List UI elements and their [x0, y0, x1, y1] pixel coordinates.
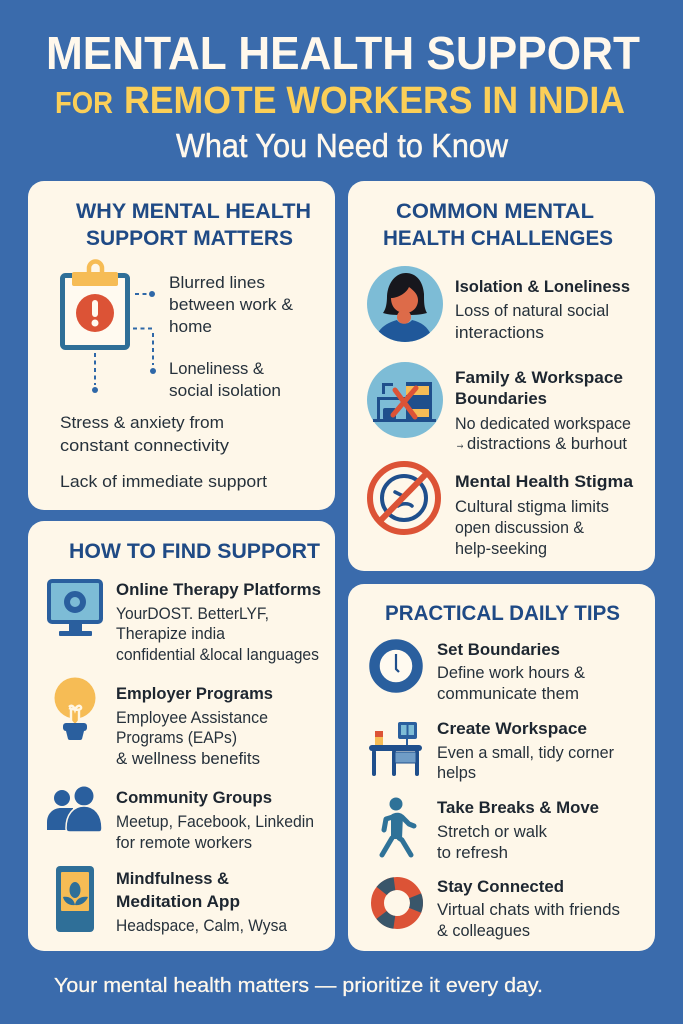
heading: why it matters: SUPPORT MATTERS: [86, 227, 293, 250]
text: take breaks: [437, 798, 599, 862]
heading: challenges: HEALTH CHALLENGES: [383, 227, 613, 250]
footer message: Your mental health matters — prioritize it every day.: [54, 975, 543, 997]
text: community groups: [116, 788, 314, 852]
heading: tips: PRACTICAL DAILY TIPS: [385, 602, 620, 625]
text: mental health stigma: help-seeking: [455, 540, 547, 558]
text: family and workspace boundaries: Family & Workspace: [455, 368, 623, 387]
title: [46, 27, 640, 164]
text: isolation and loneliness: [455, 277, 630, 342]
icon: desk: [369, 722, 422, 776]
heading: why it matters: [76, 200, 311, 250]
text: isolation and loneliness: Isolation & Loneliness: [455, 277, 630, 296]
text: employer programs: Programs (EAPs): [116, 729, 237, 747]
text: why points: social isolation: [169, 382, 281, 400]
text: set boundaries: Set Boundaries: [437, 640, 560, 659]
text: mindfulness apps: Headspace, Calm, Wysa: [116, 917, 288, 935]
text: why points: between work &: [169, 296, 293, 314]
icon: clock: [374, 644, 418, 688]
text: stay connected: & colleagues: [437, 922, 530, 940]
title: MENTAL HEALTH SUPPORT: [46, 27, 640, 79]
text: take breaks: Take Breaks & Move: [437, 798, 599, 817]
panel: why mental health support matters: [28, 181, 335, 510]
text: take breaks: to refresh: [437, 844, 508, 862]
text: why points: Loneliness &: [169, 360, 264, 378]
text: employer programs: & wellness benefits: [116, 750, 260, 768]
icon: life ring: [378, 884, 416, 922]
heading: challenges: [383, 200, 613, 250]
text: mental health stigma: Cultural stigma limits: [455, 498, 609, 516]
text: family and workspace boundaries: No dedicated workspace: [455, 415, 631, 433]
text: family and workspace boundaries: →: [455, 435, 465, 453]
text: mindfulness apps: Meditation App: [116, 892, 240, 911]
text: set boundaries: Define work hours &: [437, 664, 585, 682]
panel: practical daily tips: [348, 584, 655, 951]
text: online therapy: confidential &local languages: [116, 646, 319, 664]
panel: common mental health challenges: [348, 181, 655, 571]
icon: clipboard with alert: [62, 262, 128, 348]
icon: meditation app phone: [56, 866, 94, 932]
text: create workspace: [437, 719, 614, 782]
text: employer programs: Employee Assistance: [116, 709, 268, 727]
text: mental health stigma: Mental Health Stigma: [455, 472, 634, 491]
text: stay connected: [437, 877, 620, 940]
text: employer programs: Employer Programs: [116, 684, 273, 703]
text: set boundaries: [437, 640, 585, 703]
icon: workspace crossed: [367, 362, 443, 438]
text: isolation and loneliness: interactions: [455, 324, 544, 342]
panel: how to find support: [28, 521, 335, 951]
text: family and workspace boundaries: [455, 368, 631, 453]
icon: stigma prohibited: [370, 464, 438, 532]
heading: find support: HOW TO FIND SUPPORT: [69, 540, 320, 563]
text: online therapy: [116, 580, 321, 664]
text: isolation and loneliness: Loss of natural social: [455, 302, 609, 320]
title: What You Need to Know: [176, 127, 508, 164]
text: why points: constant connectivity: [60, 437, 230, 455]
title: FOR: [55, 85, 113, 120]
icon: lonely person: [367, 266, 443, 347]
text: why points: home: [169, 318, 212, 336]
text: create workspace: helps: [437, 764, 476, 782]
text: why points: Blurred lines: [169, 274, 265, 292]
connector lines: [92, 291, 156, 393]
title: REMOTE WORKERS IN INDIA: [124, 80, 625, 122]
text: community groups: Meetup, Facebook, Linkedin: [116, 813, 314, 831]
heading: why it matters: WHY MENTAL HEALTH: [76, 200, 311, 223]
text: create workspace: Create Workspace: [437, 719, 587, 738]
text: mindfulness apps: [116, 869, 288, 935]
text: family and workspace boundaries: Boundaries: [455, 389, 547, 408]
text: set boundaries: communicate them: [437, 685, 579, 703]
text: stay connected: Stay Connected: [437, 877, 564, 896]
heading: challenges: COMMON MENTAL: [396, 200, 594, 223]
text: community groups: for remote workers: [116, 834, 252, 852]
icon: light bulb: [54, 678, 96, 740]
text: create workspace: Even a small, tidy corner: [437, 744, 614, 762]
text: mental health stigma: [455, 472, 634, 558]
text: online therapy: Online Therapy Platforms: [116, 580, 321, 599]
text: mindfulness apps: Mindfulness &: [116, 869, 229, 888]
text: why points: Lack of immediate support: [60, 473, 267, 491]
text: community groups: Community Groups: [116, 788, 272, 807]
icon: people: [47, 786, 102, 832]
text: mental health stigma: open discussion &: [455, 519, 584, 537]
text: family and workspace boundaries: distractions & burhout: [467, 435, 627, 453]
text: why points: Stress & anxiety from: [60, 414, 224, 432]
text: employer programs: [116, 684, 273, 768]
icon: monitor: [49, 581, 101, 636]
text: why points: [60, 274, 293, 491]
text: stay connected: Virtual chats with friends: [437, 901, 620, 919]
text: online therapy: YourDOST. BetterLYF,: [116, 605, 269, 623]
text: take breaks: Stretch or walk: [437, 823, 548, 841]
icon: walking person: [382, 798, 414, 855]
text: online therapy: Therapize india: [116, 625, 226, 643]
